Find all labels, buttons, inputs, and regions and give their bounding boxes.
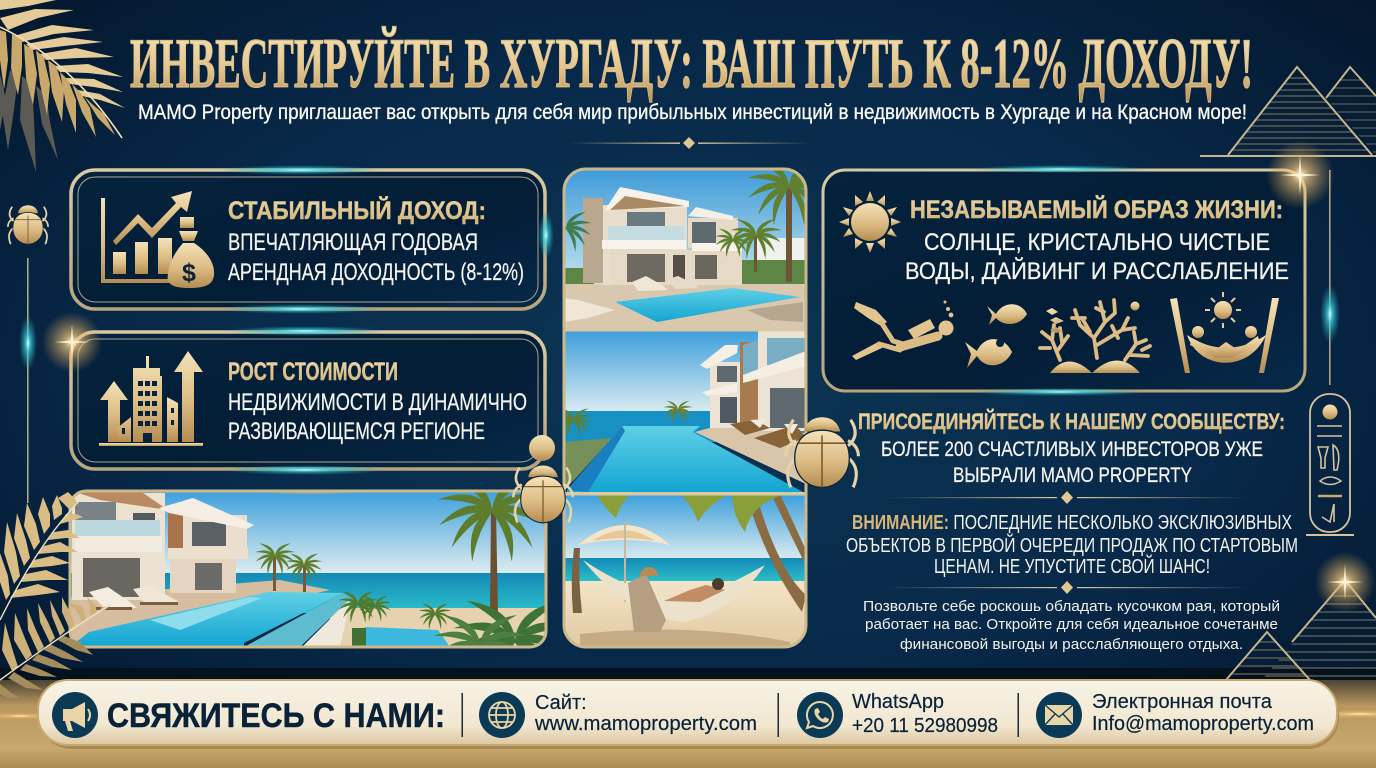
contact: email: Электронная почта — [1092, 691, 1273, 713]
text block: join community: БОЛЕЕ 200 СЧАСТЛИВЫХ ИНВЕСТОРОВ УЖЕ — [881, 438, 1263, 461]
icon: cartouche — [1306, 394, 1354, 535]
icon: fish — [965, 304, 1027, 368]
left vertical line with glow — [19, 258, 37, 503]
icon: coral reef — [1040, 300, 1150, 373]
icon: diver — [852, 300, 954, 360]
text: dynamic region: НЕДВИЖИМОСТИ В ДИНАМИЧНО — [228, 389, 527, 416]
photos: villa column — [566, 170, 804, 646]
text block: attention: ВНИМАНИЕ: ПОСЛЕДНИЕ НЕСКОЛЬКО ЭКСКЛЮЗИВНЫХ — [852, 512, 1292, 534]
divider — [885, 491, 1249, 504]
contact: WhatsApp — [797, 691, 998, 738]
text block: attention: ЦЕНАМ. НЕ УПУСТИТЕ СВОЙ ШАНС! — [934, 554, 1210, 578]
photo: villa with ocean pool — [72, 492, 544, 646]
decoration: gold palm top left — [0, 0, 125, 172]
contact bar — [38, 680, 1339, 749]
heading: lifestyle: НЕЗАБЫВАЕМЫЙ ОБРАЗ ЖИЗНИ: — [910, 194, 1283, 224]
heading: contact us: СВЯЖИТЕСЬ С НАМИ: — [107, 697, 445, 735]
heading: value growth: РОСТ СТОИМОСТИ — [228, 358, 398, 386]
text: rental yield: АРЕНДНАЯ ДОХОДНОСТЬ (8-12%) — [228, 259, 524, 286]
text: lifestyle — [905, 229, 1289, 285]
header divider — [568, 137, 810, 149]
heading: stable income: СТАБИЛЬНЫЙ ДОХОД: — [228, 195, 486, 225]
decoration: pyramids bottom right — [1220, 580, 1376, 680]
text block: closing message: работает на вас. Откройте для себя идеальное сочетанме — [865, 616, 1278, 633]
text block: join community: ВЫБРАЛИ MAMO PROPERTY — [953, 464, 1192, 487]
text block: attention — [846, 512, 1298, 578]
text block: join community — [858, 409, 1285, 487]
contact: WhatsApp: WhatsApp — [852, 691, 944, 713]
decoration: gold palm bottom left — [0, 492, 110, 698]
contact: WhatsApp: +20 11 52980998 — [852, 715, 998, 737]
right vertical line with glow — [1320, 170, 1340, 385]
subtitle: MAMO Property приглашает вас открыть для себя мир прибыльных инвестиций в недвижимость в Хургаде и на Красном море! — [138, 101, 1247, 124]
text block: closing message: Позвольте себе роскошь обладать кусочком рая, который — [863, 598, 1280, 615]
text block: join community: ПРИСОЕДИНЯЙТЕСЬ К НАШЕМУ СООБЩЕСТВУ: — [858, 409, 1285, 434]
icon: growth chart and money bag — [101, 191, 214, 288]
flare on value growth panel — [42, 312, 102, 372]
photo: hammock on the beach — [564, 494, 806, 647]
text: dynamic region — [228, 389, 527, 445]
separators — [564, 328, 806, 332]
scarab right of photos — [786, 417, 858, 487]
text: lifestyle: СОЛНЦЕ, КРИСТАЛЬНО ЧИСТЫЕ — [924, 229, 1270, 256]
contact: website — [479, 692, 757, 738]
decoration: pyramids top right — [1200, 67, 1376, 156]
divider — [885, 581, 1249, 594]
panel: lifestyle — [823, 165, 1305, 396]
icon glyph: dollar: $ — [182, 259, 196, 287]
icon: sun — [839, 191, 901, 253]
contact: website: Сайт: — [535, 692, 587, 714]
text block: closing message — [863, 598, 1280, 653]
photo: villa with garden pool — [566, 170, 804, 328]
contact: website: www.mamoproperty.com — [534, 713, 757, 735]
scarab small left — [8, 205, 48, 244]
icon: hammock with sun — [1170, 292, 1279, 373]
flare on lifestyle panel — [1266, 141, 1334, 209]
text: dynamic region: РАЗВИВАЮЩЕМСЯ РЕГИОНЕ — [228, 418, 485, 445]
icon: megaphone — [52, 692, 98, 738]
panel: stable income — [71, 165, 554, 314]
text: rental yield: ВПЕЧАТЛЯЮЩАЯ ГОДОВАЯ — [228, 229, 478, 256]
icon: buildings and arrows — [99, 351, 203, 446]
text block: closing message: финансовой выгоды и расслабляющего отдыха. — [900, 636, 1243, 653]
scarab with sun disk — [513, 435, 573, 523]
photo frames — [70, 169, 806, 647]
text: lifestyle: ВОДЫ, ДАЙВИНГ И РАССЛАБЛЕНИЕ — [905, 257, 1289, 285]
text: rental yield — [228, 229, 524, 286]
photo: infinity pool — [556, 331, 806, 492]
contact: email: Info@mamoproperty.com — [1092, 713, 1314, 735]
contact: email — [1036, 691, 1314, 738]
flare on bottom pyramid — [1315, 552, 1375, 612]
panel: value growth — [71, 326, 545, 475]
